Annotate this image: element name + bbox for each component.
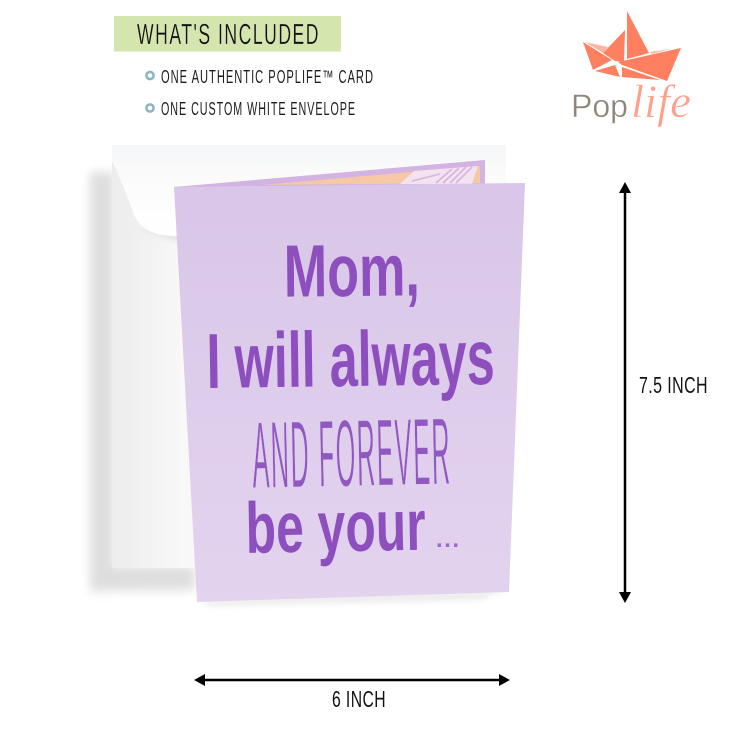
heading: what's included [114,16,341,52]
card message [206,228,495,569]
line: be your: be your [245,486,426,569]
text: card item: ONE AUTHENTIC POPLIFE™ CARD [161,67,374,87]
envelope with shadow [90,145,506,591]
wordmark: life: life [631,76,691,128]
bullet: card item [146,72,154,79]
envelope shadow [90,172,195,591]
card back panel [174,160,485,188]
greeting card [174,160,525,606]
logo: Poplife [571,11,691,128]
label: 7.5 inch: 7.5 INCH [639,372,708,398]
arrow: width dimension [194,674,510,686]
card front [174,183,525,602]
heading: what's included: WHAT'S INCLUDED [137,19,320,51]
bullet: envelope item [146,104,154,112]
inside peach art [262,166,480,185]
label: 6 inch: 6 INCH [332,686,386,712]
envelope flap [112,145,506,236]
line: ellipsis: ... [436,526,459,553]
list: included items [146,67,374,119]
arrow: height dimension [619,182,631,603]
text: envelope item: ONE CUSTOM WHITE ENVELOPE [161,99,356,119]
envelope body [112,145,506,568]
line: Mom,: Mom, [283,228,420,313]
line: I will always: I will always [206,313,495,405]
card bottom shadow [200,590,505,606]
flap shadow [135,228,195,241]
inside stripes [400,166,478,184]
icon: origami boat [583,11,681,81]
wordmark: Pop: Pop [571,88,628,124]
